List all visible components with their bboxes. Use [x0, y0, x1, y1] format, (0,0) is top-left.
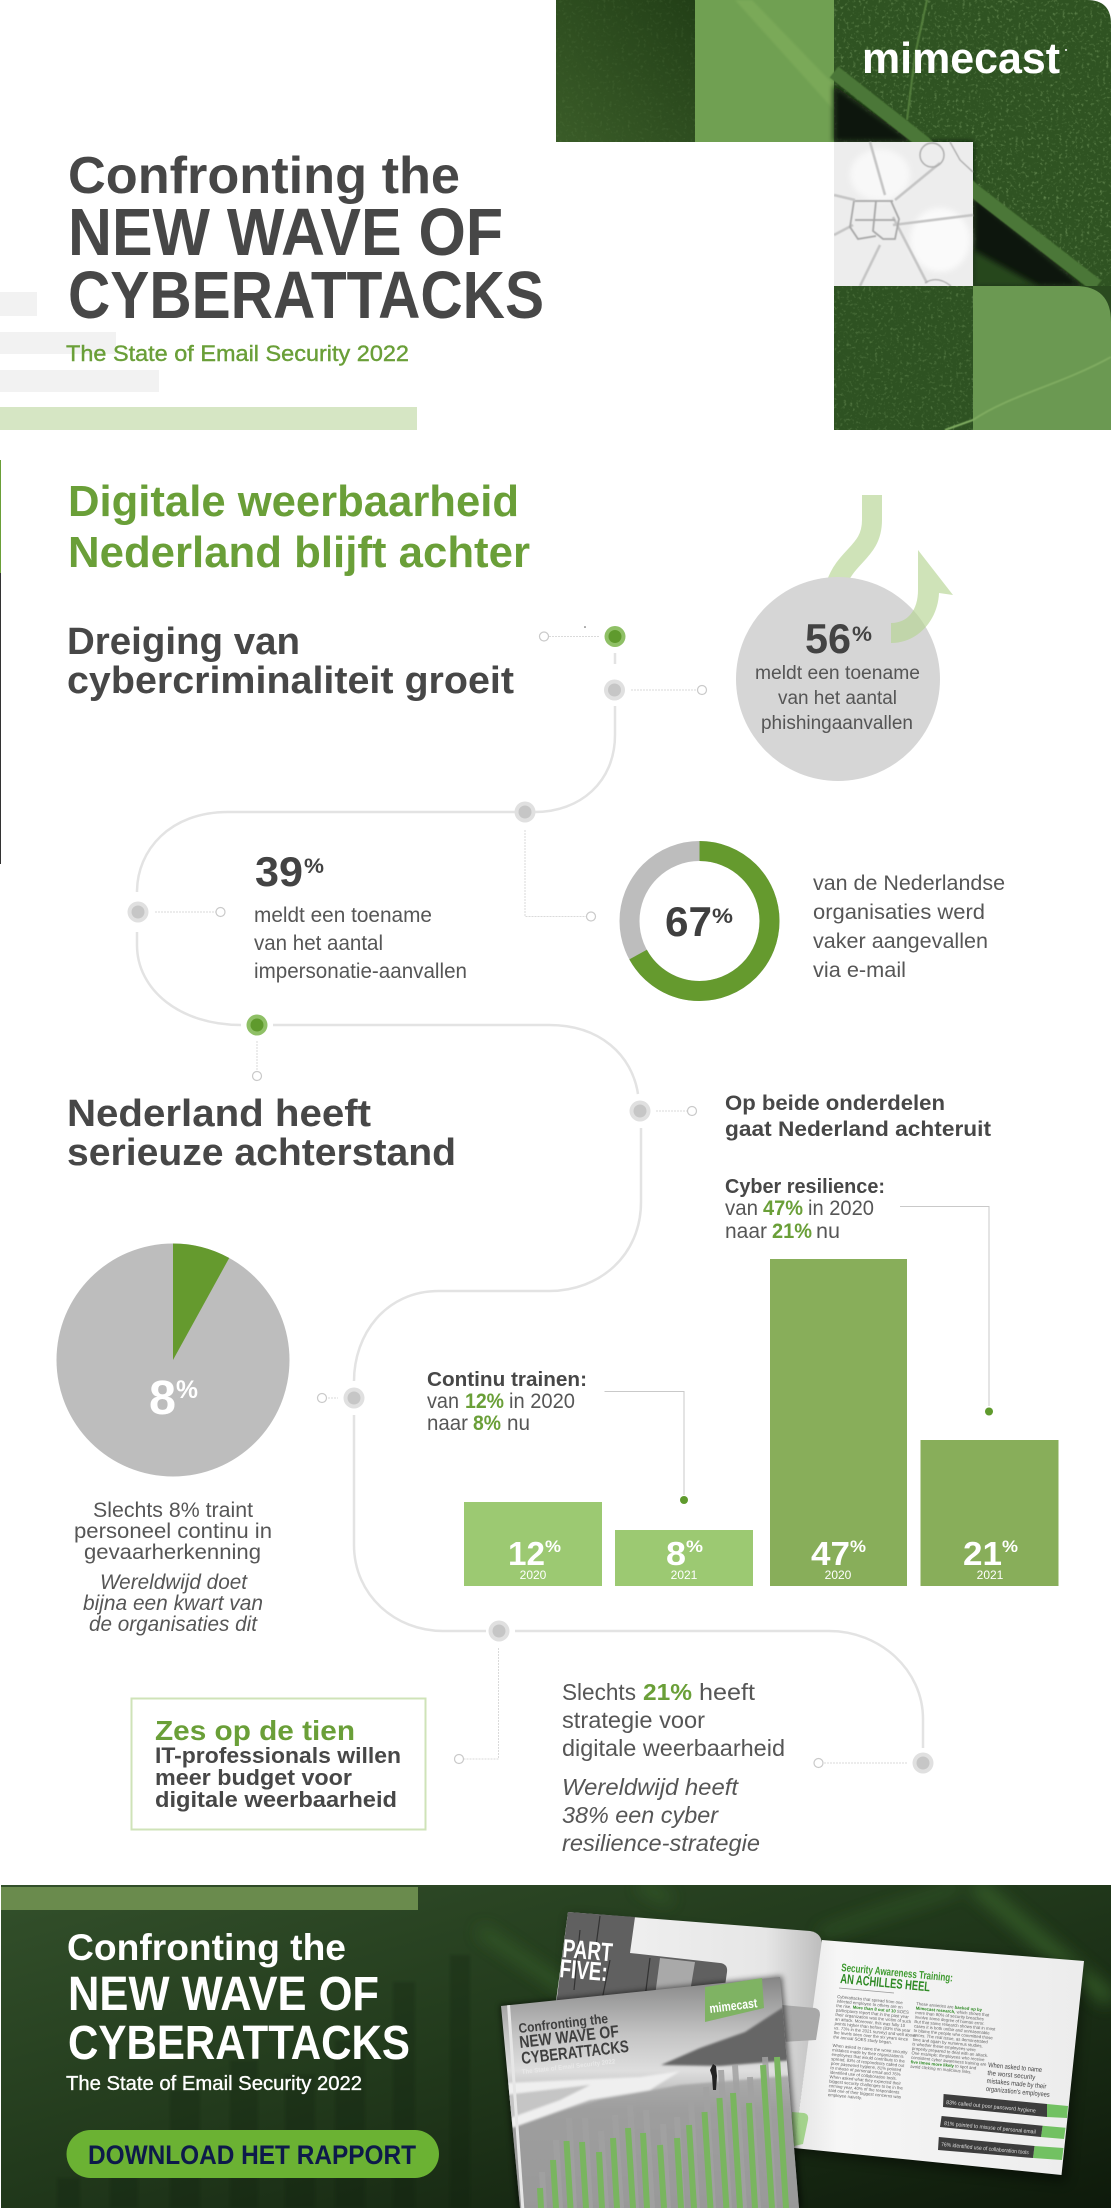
article text column two: These anxieties are backed up by	[916, 2001, 983, 2012]
heading: Dreiging: Dreiging van	[67, 621, 300, 663]
stat: 56 percent circle: van het aantal	[778, 688, 897, 709]
title: CYBERATTACKS	[68, 258, 544, 333]
stat: 39 percent: %	[304, 855, 324, 878]
article side note: organization's employees	[986, 2086, 1050, 2099]
open spread	[540, 1912, 1084, 2182]
heading: Op beide onderdelen: gaat Nederland achteruit	[725, 1118, 991, 1141]
heading: Nederland heeft: Nederland heeft	[67, 1093, 371, 1135]
article text column one: biggest security challenges to be in the	[829, 2079, 904, 2091]
connector: cyber resilience	[900, 1206, 993, 1416]
cover title: CYBERATTACKS	[520, 2037, 630, 2068]
donut chart: 67 percent: 67	[665, 898, 712, 945]
article side note: mistakes made by their	[986, 2078, 1047, 2091]
article stat bars: 76% identified use of collaboration tools	[941, 2142, 1029, 2156]
stat: 56 percent circle: %	[852, 623, 872, 646]
subtitle: The State of Email Security 2022	[66, 341, 409, 366]
text: strategy: resilience-strategie	[562, 1830, 760, 1856]
download button	[66, 2130, 439, 2178]
label: cyber resilience: van	[725, 1197, 758, 1220]
bar: 8 percent 2021	[615, 1530, 753, 1586]
footer title	[66, 1927, 410, 2095]
article stat bars	[938, 2094, 1068, 2160]
footer panel	[1, 1885, 1111, 2208]
article text column two	[910, 2001, 998, 2076]
label: cyber resilience: 47%	[763, 1197, 803, 1220]
decorative blurred bars	[0, 292, 417, 430]
timeline path	[128, 626, 934, 1774]
node: both parts	[630, 1100, 696, 1122]
article stat bars: 81% pointed to misuse of personal email	[944, 2121, 1036, 2136]
cover logo: mimecast	[709, 1995, 759, 2016]
wood panel	[556, 1912, 727, 2010]
node: strategy	[814, 1752, 934, 1774]
article text column two: time and again by numerous studies,	[913, 2037, 983, 2048]
text: strategy: strategie voor	[562, 1707, 705, 1733]
bar: 12 percent 2020: 12	[508, 1535, 545, 1572]
left edge line	[0, 460, 1, 864]
bar: 21 percent 2021: 2021	[977, 1568, 1004, 1582]
bar: 21 percent 2021: %	[1002, 1537, 1018, 1556]
article text column one: said one of their biggest concerns was	[828, 2088, 901, 2099]
pie chart: 8 percent: %	[176, 1376, 198, 1404]
label: continu trainen: in 2020	[509, 1390, 575, 1413]
label: continu trainen: van	[427, 1390, 459, 1413]
sand	[510, 2075, 800, 2208]
bar: 21 percent 2021	[920, 1440, 1058, 1586]
label: cyber resilience	[725, 1176, 885, 1243]
article side note	[986, 2062, 1053, 2099]
article text column one: the rise. More than 8 out of 10 SOES	[836, 2003, 909, 2015]
text: pie description: gevaarherkenning	[84, 1541, 261, 1564]
cover title: NEW WAVE OF	[518, 2022, 620, 2052]
stat: 39 percent: meldt een toename	[254, 904, 432, 927]
report mockup	[495, 1912, 1084, 2208]
label: continu trainen: 8%	[473, 1412, 501, 1435]
label: cyber resilience: naar	[725, 1220, 767, 1243]
title: Confronting the	[68, 147, 460, 205]
bar: 21 percent 2021: 21	[963, 1535, 1002, 1572]
label: continu trainen: naar	[427, 1412, 468, 1435]
stat: 56 percent circle: meldt een toename	[755, 663, 920, 684]
heading: Dreiging: cybercriminaliteit groeit	[67, 660, 514, 702]
article text column one: mistakes made by their organization's	[832, 2047, 904, 2059]
text: pie description	[74, 1499, 272, 1636]
logo: mimecast: mimecast	[862, 34, 1060, 83]
bar: 12 percent 2020: %	[545, 1537, 561, 1556]
callout: Zes op de tien: meer budget voor	[155, 1765, 352, 1790]
callout: Zes op de tien: Zes op de tien	[155, 1715, 355, 1746]
article text column one: poor password hygiene, 81% pointed	[831, 2061, 902, 2072]
article text column one: participants report that in the past year	[836, 2007, 910, 2019]
callout: Zes op de tien: IT-professionals willen	[155, 1743, 401, 1768]
title: NEW WAVE OF	[68, 195, 503, 270]
article text column two: avoid clicking on malicious links.	[910, 2064, 972, 2075]
wood panel: FIVE:	[558, 1953, 609, 1987]
footer title: CYBERATTACKS	[68, 2017, 410, 2070]
article text column one: Cyberattacks that spread from one	[837, 1994, 904, 2005]
stat: 56 percent circle: phishingaanvallen	[761, 713, 913, 734]
donut chart: 67 percent	[630, 851, 770, 991]
article text column one: coming year, 40% of the respondents	[828, 2083, 900, 2095]
article text column one: When asked what they expected their	[829, 2074, 902, 2086]
text: 67 percent description: vaker aangevallen	[813, 930, 988, 953]
article text column two: Mimecast research, which shows that	[915, 2005, 990, 2017]
stat: 39 percent	[254, 848, 467, 983]
article text column one	[828, 1994, 920, 2105]
article text column two: But that same research shows that in most	[914, 2019, 996, 2032]
arrow: incoming	[836, 495, 872, 585]
article side note: the worst security	[987, 2070, 1036, 2082]
text: 67 percent description: van de Nederlandse	[813, 872, 1005, 895]
footer title: Confronting the	[67, 1927, 346, 1968]
article text column one: an attack. Moreover, this was fully 10	[835, 2016, 906, 2028]
node: pie	[318, 1388, 364, 1408]
article text column two: involve some degree of human error.	[915, 2014, 985, 2026]
web cell	[834, 142, 973, 286]
footer title: The State of Email Security 2022	[66, 2073, 362, 2095]
donut chart: 67 percent: %	[712, 905, 733, 928]
article stat bars: 83% called out poor password hygiene	[946, 2100, 1036, 2114]
article text column two: is whether these employees were	[912, 2041, 977, 2052]
callout: Zes op de tien: digitale weerbaarheid	[155, 1787, 397, 1812]
text: strategy: digitale weerbaarheid	[562, 1735, 785, 1761]
node: 67 percent	[514, 802, 596, 921]
cover title: Confronting the	[518, 2011, 609, 2036]
pie chart: 8 percent: 8	[149, 1372, 176, 1425]
article text column one: points higher than before (83% this year	[834, 2021, 911, 2033]
arrow: outgoing	[891, 550, 953, 643]
article text column two: five times more likely to spot and	[910, 2059, 977, 2070]
text: 67 percent description: organisaties werd	[813, 901, 985, 924]
article text column one: employees that would contribute to the	[831, 2052, 906, 2064]
bars: comparison	[542, 2057, 774, 2208]
header image collage	[556, 0, 1111, 430]
stat: 56 percent circle: 56	[805, 615, 851, 662]
front cover shadow	[500, 1976, 802, 2208]
article text column one: When asked to name the worst security	[832, 2043, 909, 2055]
footer title: NEW WAVE OF	[68, 1968, 379, 2021]
callout: Zes op de tien	[132, 1698, 426, 1830]
article text column one: their organization was the victim of such	[835, 2012, 912, 2024]
pie chart: 8 percent	[56, 1244, 290, 1476]
waves	[505, 2071, 680, 2128]
node: section two green	[246, 1014, 268, 1080]
article text column one: employee naivety.	[828, 2092, 862, 2100]
bar: 8 percent 2021: 2021	[671, 1568, 698, 1582]
article text column one: the levels seen over the six years since	[834, 2030, 909, 2042]
article side note: When asked to name	[988, 2062, 1042, 2074]
mountains	[661, 2005, 795, 2066]
label: cyber resilience: nu	[816, 1220, 840, 1243]
connector: continu trainen	[604, 1392, 688, 1504]
wood panel: PART	[561, 1933, 614, 1967]
bar: 12 percent 2020	[464, 1502, 602, 1586]
text: strategy: 21%	[643, 1679, 692, 1705]
stat: 39 percent: 39	[255, 848, 303, 895]
heading: Digitale weerbaarheid: Digitale weerbaarheid	[68, 477, 519, 526]
heading: Nederland heeft: serieuze achterstand	[67, 1132, 456, 1174]
text: pie description: Slechts 8% traint	[93, 1499, 253, 1522]
article text column two: errors. The real issue, as demonstrated	[913, 2032, 989, 2044]
heading: Nederland heeft	[67, 1093, 456, 1174]
text: pie description: Wereldwijd doet	[100, 1571, 248, 1594]
heading: Digitale weerbaarheid: Nederland blijft achter	[68, 528, 530, 577]
bar: 47 percent 2020	[770, 1259, 907, 1586]
node: 39 percent	[128, 902, 225, 922]
article text column one: identified use of collaboration tools.	[830, 2070, 897, 2081]
node: budget	[454, 1620, 510, 1764]
bar: 47 percent 2020: %	[850, 1537, 866, 1556]
article heading: Security Awareness Training:	[841, 1962, 953, 1985]
article text column two: properly prepared to deal with an attack.	[912, 2046, 988, 2058]
stat: 56 percent circle	[736, 577, 940, 781]
stat: 39 percent: impersonatie-aanvallen	[254, 960, 467, 983]
article heading	[839, 1962, 953, 1994]
text: 67 percent description: via e-mail	[813, 959, 906, 982]
text: strategy	[562, 1679, 785, 1856]
article text column one: spread, 83% of respondents called out	[831, 2056, 905, 2068]
article text column one: the annual SOES study began.	[833, 2034, 892, 2045]
label: cyber resilience: in 2020	[808, 1197, 874, 1220]
node: 56 percent	[604, 680, 706, 700]
label: cyber resilience: Cyber resilience:	[725, 1176, 885, 1198]
article text column one: to misuse of personal email and 76%	[830, 2065, 901, 2077]
article text column two: One example: Employees who receive	[911, 2050, 985, 2062]
label: continu trainen: 12%	[465, 1390, 504, 1413]
heading: Dreiging	[67, 621, 514, 702]
front cover	[495, 1970, 805, 2208]
article heading: AN ACHILLES HEEL	[840, 1971, 931, 1994]
title	[68, 147, 544, 333]
text: 67 percent description	[813, 872, 1005, 982]
article text column two: consistent cyber awareness training are	[911, 2055, 987, 2067]
cover title: The State of Email Security 2022	[521, 2058, 616, 2076]
text: strategy: Slechts	[562, 1679, 636, 1705]
article text column two: more than 90% of security breaches	[915, 2010, 984, 2021]
text: pie description: de organisaties dit	[89, 1613, 258, 1636]
article text column one: infected employee to others are on	[836, 1998, 903, 2010]
bars: main	[540, 2057, 786, 2208]
bar: 47 percent 2020: 2020	[825, 1568, 852, 1582]
heading: Op beide onderdelen: Op beide onderdelen	[725, 1092, 945, 1115]
text: strategy: Wereldwijd heeft	[562, 1774, 740, 1800]
cover title	[518, 2011, 630, 2076]
heading: Digitale weerbaarheid	[68, 477, 530, 577]
bar chart	[464, 1259, 1058, 1586]
bar: 8 percent 2021: %	[686, 1537, 703, 1556]
label: continu trainen: Continu trainen:	[427, 1369, 587, 1391]
bar: 8 percent 2021: 8	[666, 1535, 686, 1572]
cover logo	[705, 1978, 764, 2022]
text: pie description: personeel continu in	[74, 1520, 272, 1543]
article text column one: vs. 73% in the 2021 survey) and well above	[834, 2025, 918, 2038]
text: strategy: heeft	[699, 1679, 756, 1705]
label: cyber resilience: 21%	[772, 1220, 812, 1243]
person	[710, 2064, 717, 2090]
label: continu trainen	[427, 1369, 587, 1435]
heading: Op beide onderdelen	[725, 1092, 991, 1141]
download button: DOWNLOAD HET RAPPORT	[88, 2140, 416, 2170]
text: strategy: 38% een cyber	[562, 1802, 719, 1828]
article text column two: to blame the people who committed those	[913, 2028, 994, 2040]
article text column two: cases it is both unfair and unreasonable	[914, 2023, 990, 2036]
text: pie description: bijna een kwart van	[83, 1592, 263, 1615]
node: start green	[540, 626, 626, 647]
stat: 39 percent: van het aantal	[254, 932, 383, 955]
label: continu trainen: nu	[507, 1412, 530, 1435]
bar: 12 percent 2020: 2020	[520, 1568, 547, 1582]
bar: 47 percent 2020: 47	[811, 1535, 850, 1572]
